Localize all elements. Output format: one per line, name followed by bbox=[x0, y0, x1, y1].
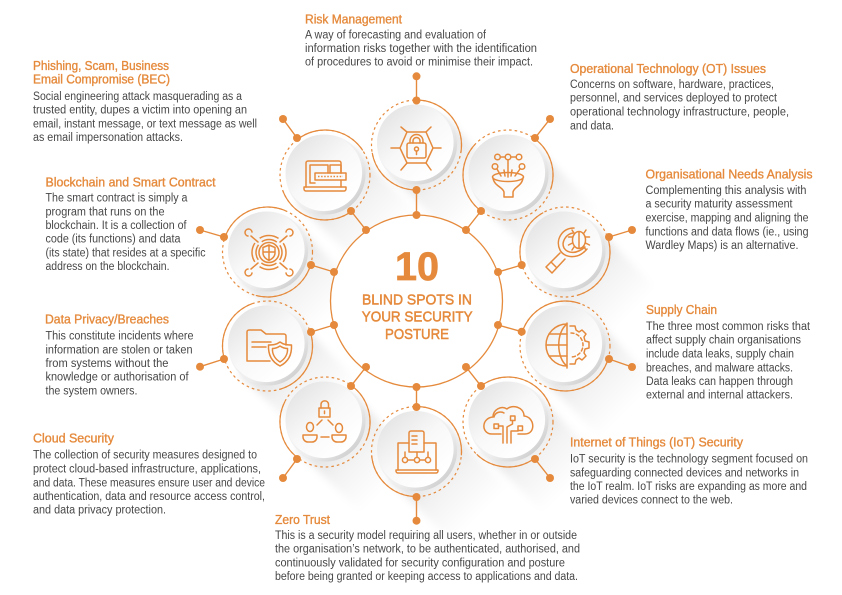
icon: blockchain shield bbox=[245, 229, 293, 276]
text: Operational Technology body bbox=[570, 79, 789, 132]
icon: folder with shield bbox=[247, 330, 292, 366]
hub: funnel (Operational Technology) bbox=[445, 112, 571, 238]
icon: bug under magnifier bbox=[546, 228, 590, 273]
text: Organisational Needs Analysis body: a security maturity assessment bbox=[646, 199, 793, 211]
text: Blockchain body: (its state) that resides at a specific bbox=[46, 248, 206, 260]
text: Blockchain body: address on the blockchain. bbox=[46, 261, 170, 273]
hub: folder shield (Data Privacy) bbox=[196, 289, 338, 403]
text: Phishing body: email, instant message, or text message as well bbox=[33, 118, 257, 130]
text: Zero Trust body: before being granted or keeping access to applications and data. bbox=[275, 571, 578, 583]
hub: lock (Risk Management) bbox=[372, 72, 462, 219]
icon: laptop with document bbox=[396, 431, 438, 473]
central title: YOUR SECURITY bbox=[362, 309, 473, 326]
panel: Cloud Security bbox=[33, 431, 265, 517]
text: Cloud Security body bbox=[33, 450, 265, 517]
heading: Organisational Needs Analysis: Organisational Needs Analysis bbox=[646, 168, 812, 182]
text: Phishing body bbox=[33, 91, 257, 144]
icon: data funnel bbox=[492, 154, 525, 197]
icon: padlock in hexagon bbox=[391, 127, 441, 170]
text: Zero Trust body: This is a security model requiring all users, whether in or outside bbox=[275, 530, 577, 542]
text: Data Privacy body: the system owners. bbox=[46, 386, 138, 398]
heading: Supply Chain: Supply Chain bbox=[646, 303, 717, 317]
text: Data Privacy body: knowledge or authorisation of bbox=[46, 372, 189, 384]
text: Organisational Needs Analysis body bbox=[646, 185, 808, 252]
heading: Blockchain: Blockchain and Smart Contract bbox=[46, 176, 216, 190]
text: Operational Technology body: and data. bbox=[570, 120, 614, 132]
text: Zero Trust body bbox=[275, 530, 580, 583]
panel: Data Privacy bbox=[45, 313, 194, 398]
text: Phishing body: trusted entity, dupes a victim into opening an bbox=[33, 105, 247, 117]
hub: shield network (Blockchain) bbox=[196, 195, 338, 309]
text: Risk Management body: of procedures to avoid or minimise their impact. bbox=[305, 57, 533, 69]
text: Risk Management body: A way of forecasting and evaluation of bbox=[305, 29, 487, 41]
heading: Phishing bbox=[33, 59, 170, 86]
hub: laptop (Phishing) bbox=[262, 112, 388, 238]
text: Phishing body: as email impersonation attacks. bbox=[33, 132, 183, 144]
text: Blockchain body: code (its functions) and data bbox=[46, 234, 181, 246]
panel: Blockchain bbox=[46, 176, 216, 273]
panel: Supply Chain bbox=[646, 303, 811, 402]
panel: Organisational Needs Analysis bbox=[646, 168, 812, 252]
text: Data Privacy body: from systems without the bbox=[46, 358, 168, 370]
central title bbox=[362, 291, 473, 343]
text: Blockchain body bbox=[46, 193, 206, 273]
panel: Internet of Things bbox=[570, 436, 808, 507]
central circle bbox=[330, 215, 502, 387]
text: Supply Chain body: Data leaks can happen through bbox=[646, 376, 793, 388]
text: Internet of Things body bbox=[570, 453, 808, 507]
text: Organisational Needs Analysis body: functions and data flows (ie., using bbox=[646, 226, 808, 238]
heading: Risk Management: Risk Management bbox=[305, 13, 402, 27]
text: Data Privacy body: information are stolen or taken bbox=[46, 344, 192, 356]
icon: cloud with circuit bbox=[484, 407, 533, 443]
text: Cloud Security body: and data privacy protection. bbox=[33, 505, 166, 517]
text: Internet of Things body: the IoT realm. IoT risks are expanding as more and bbox=[570, 481, 807, 493]
heading: Data Privacy: Data Privacy/Breaches bbox=[45, 313, 169, 327]
text: Internet of Things body: IoT security is the technology segment focused on bbox=[570, 453, 808, 465]
text: Internet of Things body: safeguarding connected devices and networks in bbox=[570, 467, 799, 479]
heading: Cloud Security: Cloud Security bbox=[33, 431, 115, 445]
text: Operational Technology body: Concerns on software, hardware, practices, bbox=[570, 79, 774, 91]
panel: Zero Trust bbox=[275, 513, 580, 583]
text: Blockchain body: blockchain. It is a collection of bbox=[46, 220, 187, 232]
text: Organisational Needs Analysis body: Wardley Maps) is an alternative. bbox=[646, 240, 798, 252]
icon: half globe half gear bbox=[546, 323, 589, 368]
text: Internet of Things body: varied devices connect to the web. bbox=[570, 495, 733, 507]
text: Operational Technology body: operational technology infrastructure, people, bbox=[570, 107, 789, 119]
text: Zero Trust body: the organisation’s network, to be authenticated, authorised, and bbox=[275, 544, 580, 556]
text: Organisational Needs Analysis body: exercise, mapping and aligning the bbox=[646, 213, 808, 225]
long drop shadows behind discs bbox=[240, 117, 656, 543]
icon: laptop with code bar bbox=[304, 161, 346, 191]
panel: Phishing bbox=[33, 59, 257, 144]
text: Risk Management body: information risks together with the identification bbox=[305, 43, 537, 55]
text: Operational Technology body: personnel, and services deployed to protect bbox=[570, 93, 778, 105]
text: Blockchain body: The smart contract is simply a bbox=[46, 193, 188, 205]
heading: Internet of Things: Internet of Things (IoT) Security bbox=[570, 436, 744, 450]
text: Supply Chain body bbox=[646, 321, 811, 402]
hub: network lock (Cloud Security) bbox=[262, 359, 388, 485]
text: Supply Chain body: breaches, and malware attacks. bbox=[646, 362, 793, 374]
heading: Operational Technology: Operational Technology (OT) Issues bbox=[570, 62, 766, 76]
icon: lock and two users bbox=[303, 401, 346, 442]
heading: Phishing: Phishing, Scam, Business bbox=[33, 59, 169, 73]
text: Cloud Security body: protect cloud-based infrastructure, applications, bbox=[33, 464, 261, 476]
central title: POSTURE bbox=[385, 326, 449, 343]
hub: bug magnifier (Organisational Needs Analysis) bbox=[494, 195, 636, 309]
text: Phishing body: Social engineering attack masquerading as a bbox=[33, 91, 243, 103]
text: Data Privacy body bbox=[46, 330, 194, 398]
heading: Zero Trust: Zero Trust bbox=[275, 513, 330, 527]
text: Supply Chain body: affect supply chain organisations bbox=[646, 335, 801, 347]
central title: BLIND SPOTS IN bbox=[362, 291, 472, 308]
text: Organisational Needs Analysis body: Complementing this analysis with bbox=[646, 185, 806, 197]
text: Blockchain body: program that runs on the bbox=[46, 207, 164, 219]
hub: cloud (Internet of Things) bbox=[445, 359, 571, 485]
heading: Phishing: Email Compromise (BEC) bbox=[33, 72, 170, 86]
text: Supply Chain body: include data leaks, supply chain bbox=[646, 349, 794, 361]
text: Zero Trust body: continuously validated for security configuration and posture bbox=[275, 557, 565, 569]
text: Cloud Security body: and data. These measures ensure user and device bbox=[33, 478, 265, 490]
text: Supply Chain body: external and internal attackers. bbox=[646, 390, 793, 402]
text: Supply Chain body: The three most common risks that bbox=[646, 321, 811, 333]
figure 10: 10 bbox=[395, 245, 439, 289]
text: Cloud Security body: The collection of security measures designed to bbox=[33, 450, 257, 462]
hub: gear globe (Supply Chain) bbox=[494, 289, 636, 403]
text: Data Privacy body: This constitute incidents where bbox=[46, 330, 194, 342]
text: Cloud Security body: authentication, data and resource access control, bbox=[33, 491, 265, 503]
text: Risk Management body bbox=[305, 29, 537, 69]
hub: document laptop (Zero Trust) bbox=[372, 383, 462, 525]
panel: Operational Technology bbox=[570, 62, 789, 132]
panel: Risk Management bbox=[305, 13, 537, 69]
